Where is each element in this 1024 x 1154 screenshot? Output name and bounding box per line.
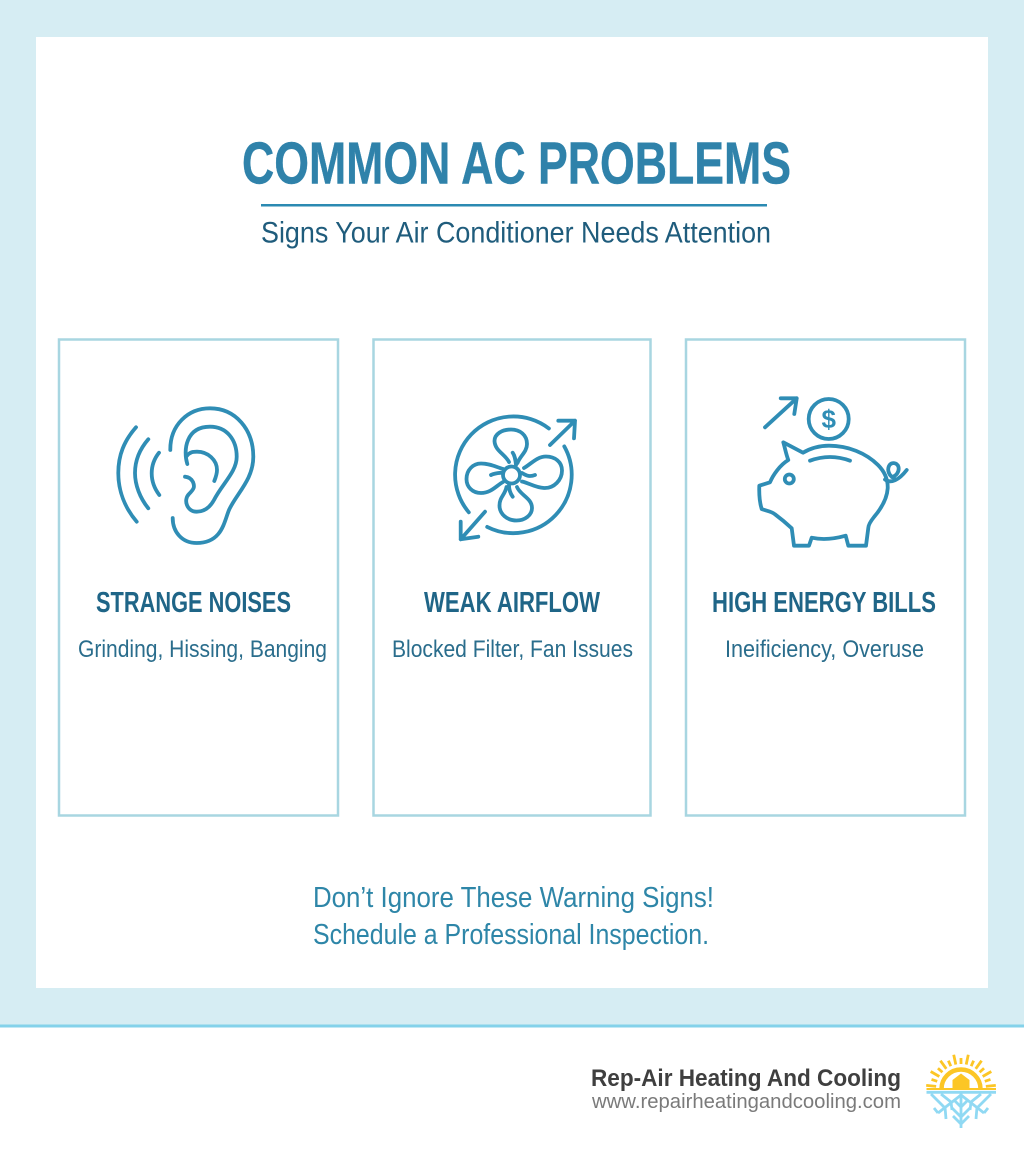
heading: weak airflow: WEAK AIRFLOW bbox=[424, 587, 600, 619]
heading: strange noises: STRANGE NOISES bbox=[96, 587, 291, 619]
panel: strange noises bbox=[59, 340, 338, 816]
logo: sun, house and snowflake bbox=[926, 1055, 996, 1128]
call to action bbox=[313, 882, 714, 951]
footer band bbox=[0, 1024, 1024, 1154]
sun rays bbox=[926, 1055, 996, 1089]
description: high energy bills: Ineificiency, Overuse bbox=[725, 636, 924, 663]
icon: ear with sound waves bbox=[118, 408, 253, 543]
description: weak airflow: Blocked Filter, Fan Issues bbox=[392, 636, 633, 663]
footer website: www.repairheatingandcooling.com bbox=[591, 1091, 901, 1113]
coin dollar sign: $ bbox=[821, 404, 836, 434]
icon: piggy bank with coin bbox=[759, 398, 907, 546]
call to action: Don’t Ignore These Warning Signs! bbox=[313, 882, 714, 914]
call to action: Schedule a Professional Inspection. bbox=[313, 919, 709, 951]
heading: high energy bills: HIGH ENERGY BILLS bbox=[712, 587, 936, 619]
snowflake bbox=[926, 1092, 996, 1128]
white main panel bbox=[36, 37, 988, 988]
title: COMMON AC PROBLEMS bbox=[242, 130, 791, 196]
footer company name: Rep-Air Heating And Cooling bbox=[591, 1065, 901, 1092]
house bbox=[952, 1074, 970, 1088]
subtitle: Signs Your Air Conditioner Needs Attention bbox=[261, 216, 771, 250]
icon: fan with arrows bbox=[455, 416, 575, 539]
panel: weak airflow bbox=[374, 340, 650, 816]
description: strange noises: Grinding, Hissing, Banging bbox=[78, 636, 327, 663]
panel: high energy bills bbox=[686, 340, 965, 816]
